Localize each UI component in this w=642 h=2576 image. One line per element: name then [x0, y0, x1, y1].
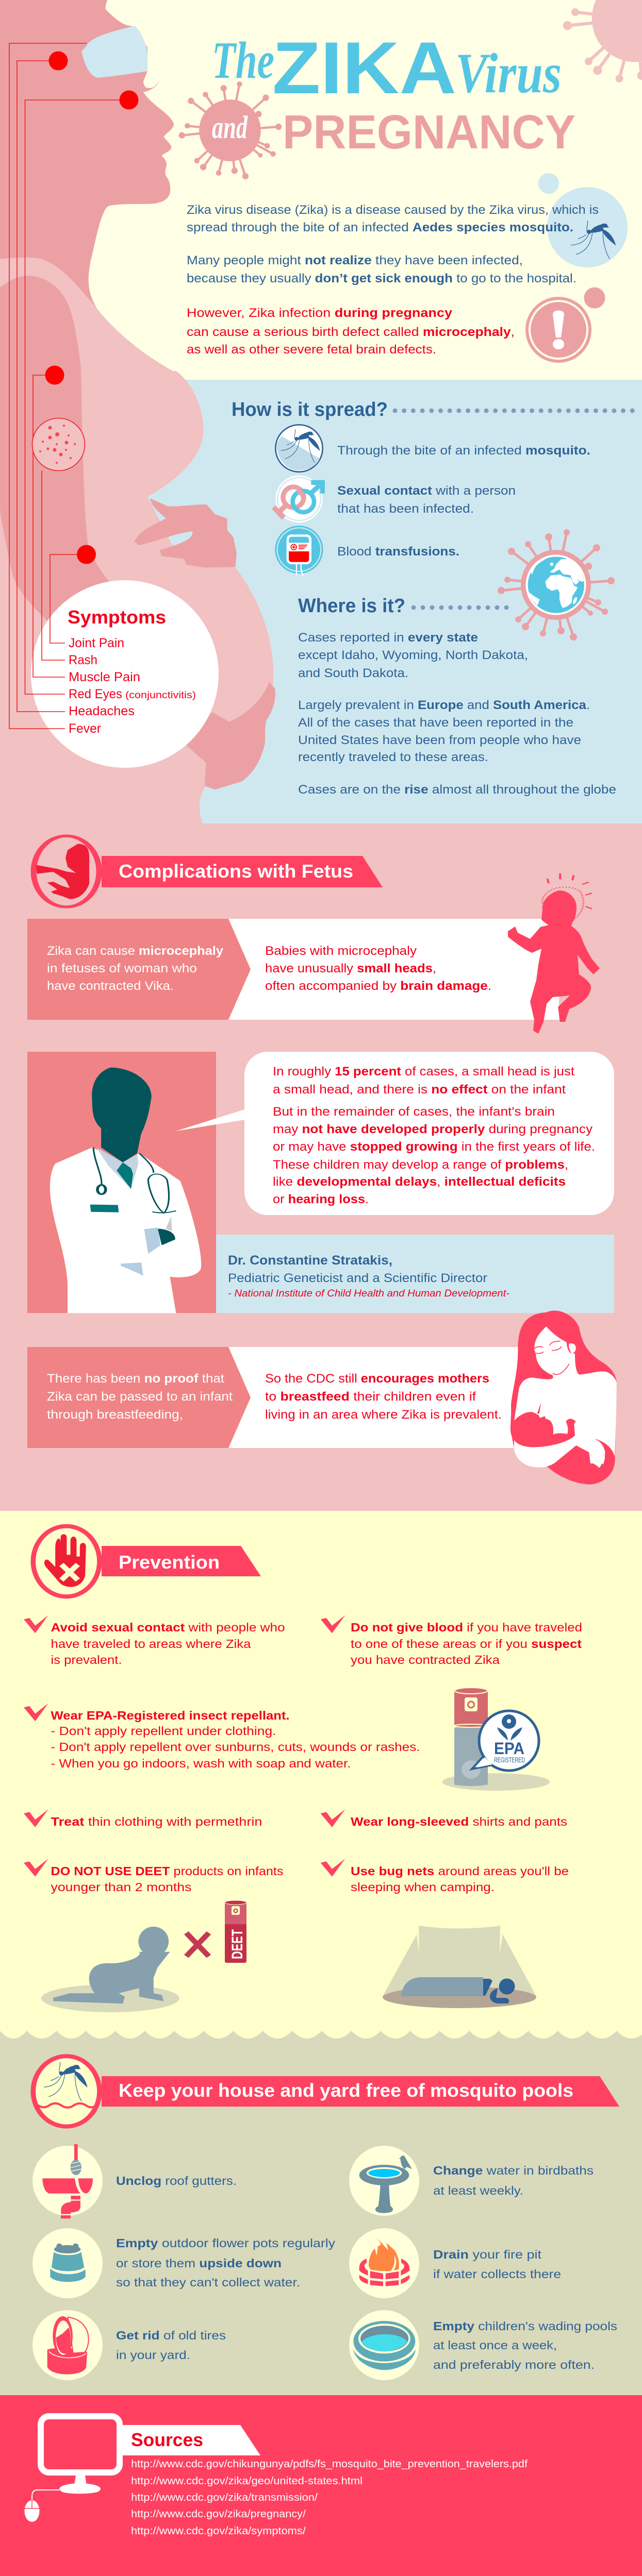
symptoms list: (conjunctivitis) — [125, 690, 196, 701]
prevention tips — [51, 1621, 582, 1894]
heading: where is it: Where is it? — [298, 595, 405, 617]
panel: doctor credit — [216, 1235, 614, 1313]
symptoms list: Headaches — [69, 704, 135, 718]
intro text: Zika virus disease (Zika) is a disease caused by the Zika virus, which is — [187, 203, 599, 217]
mosquito pools tips: in your yard. — [116, 2348, 190, 2362]
icon: wading pool — [353, 2321, 416, 2370]
where is it text: Largely prevalent in Europe and South America . — [298, 698, 590, 712]
icon: mosquito bite — [275, 425, 323, 472]
illustration: crawling baby and DEET: DEET — [229, 1929, 246, 1959]
illustration: pregnant woman silhouette — [0, 0, 275, 824]
symptoms list: Red Eyes — [69, 687, 122, 701]
title: ZIKA — [272, 27, 456, 109]
spread text: Blood transfusions. — [337, 545, 459, 559]
intro text: Many people might not realize they have been infected, — [187, 254, 523, 267]
illustration: bug net tent — [383, 1926, 536, 2008]
background: intro section — [0, 0, 642, 380]
source links: http://www.cdc.gov/zika/geo/united-states.html — [131, 2476, 363, 2487]
background: spread section — [0, 380, 642, 823]
prevention tips: Treat thin clothing with permethrin — [51, 1815, 262, 1828]
background: mosquito pools section — [0, 2031, 642, 2395]
panel: doctor quote bubble: These children may develop a range of problems , — [273, 1158, 568, 1172]
icon: flower pot — [50, 2244, 86, 2282]
illustration: eye highlight — [81, 26, 147, 78]
where is it text: and South Dakota. — [298, 666, 408, 680]
banner: complications with fetus — [34, 836, 383, 907]
where is it text: recently traveled to these areas. — [298, 750, 488, 764]
panel: breastfeeding — [27, 1347, 520, 1448]
where is it text: except Idaho, Wyoming, North Dakota, — [298, 648, 528, 662]
panel: doctor credit: Dr. Constantine Stratakis, — [228, 1253, 392, 1268]
prevention tips: - Don't apply repellent under clothing. — [51, 1724, 276, 1738]
illustration: EPA spray can: EPA — [494, 1739, 524, 1758]
source links — [131, 2459, 528, 2537]
illustration: virus top right — [563, 0, 642, 88]
where is it text — [298, 631, 616, 797]
intro text: However, Zika infection during pregnancy — [187, 306, 453, 320]
mosquito pools tips: and preferably more often. — [433, 2358, 595, 2371]
where is it text: Cases are on the rise almost all throughout the globe — [298, 783, 616, 797]
spread text: Through the bite of an infected mosquito. — [337, 444, 590, 458]
banner: sources: Sources — [131, 2429, 203, 2450]
title: The — [212, 31, 274, 90]
background: sources section — [0, 2395, 642, 2576]
source links: http://www.cdc.gov/zika/symptoms/ — [131, 2526, 306, 2537]
title: PREGNANCY — [283, 105, 575, 159]
spread text — [337, 444, 590, 559]
prevention tips: Avoid sexual contact with people who — [51, 1621, 285, 1634]
mosquito pools tips: Drain your fire pit — [433, 2248, 542, 2261]
source links: http://www.cdc.gov/zika/pregnancy/ — [131, 2508, 306, 2520]
icon: bird bath — [359, 2156, 412, 2213]
mosquito pools tips: Empty children's wading pools — [433, 2319, 617, 2333]
intro text: spread through the bite of an infected Aedes species mosquito. — [187, 221, 573, 234]
banner: sources — [123, 2425, 260, 2455]
panel: doctor quote bubble: or hearing loss . — [273, 1192, 369, 1206]
prevention tips: - Don't apply repellent over sunburns, cuts, wounds or rashes. — [51, 1740, 420, 1754]
icon: computer and mouse — [25, 2416, 120, 2522]
mosquito pools tips: Change water in birdbaths — [433, 2164, 594, 2177]
rash skin detail — [32, 418, 85, 471]
illustration: doctor — [50, 1067, 201, 1313]
prevention tips: DO NOT USE DEET products on infants — [51, 1864, 284, 1878]
background: prevention section — [0, 1511, 642, 2042]
banner: prevention: Prevention — [119, 1552, 220, 1573]
panel: breastfeeding: through breastfeeding, — [47, 1408, 183, 1422]
symptoms list: Joint Pain — [69, 636, 124, 650]
prevention tips: Wear EPA-Registered insect repellant. — [51, 1709, 290, 1722]
icon: old tires — [47, 2316, 89, 2375]
panel: microcephaly — [27, 919, 559, 1020]
symptoms list: Muscle Pain — [69, 670, 140, 684]
prevention tips: Wear long-sleeved shirts and pants — [351, 1815, 567, 1828]
prevention tips: is prevalent. — [51, 1653, 122, 1666]
mosquito pools tips: Get rid of old tires — [116, 2329, 226, 2342]
panel: microcephaly: Zika can cause microcephaly — [47, 944, 224, 958]
panel: doctor quote bubble: But in the remainder of cases, the infant's brain — [273, 1105, 555, 1119]
panel: doctor quote bubble: In roughly 15 percent of cases, a small head is just — [273, 1065, 574, 1079]
title: and — [212, 110, 248, 145]
intro text: can cause a serious birth defect called microcephaly , — [187, 325, 515, 339]
where is it text: All of the cases that have been reported in the — [298, 716, 573, 730]
illustration: EPA spray can — [442, 1688, 550, 1791]
panel: microcephaly: in fetuses of woman who — [47, 962, 197, 975]
panel: doctor credit: - National Institute of Child Health and Human Development- — [228, 1288, 509, 1299]
banner: prevention — [33, 1526, 261, 1596]
background: complications section — [0, 823, 642, 1511]
symptoms list: Rash — [69, 653, 97, 667]
panel: doctor background — [27, 1052, 216, 1313]
icon: warning exclamation — [525, 288, 605, 363]
icon: gutter — [42, 2144, 93, 2218]
spread text: Sexual contact with a person — [337, 484, 516, 498]
symptoms list — [68, 607, 196, 736]
mosquito pools tips: Empty outdoor flower pots regularly — [116, 2236, 336, 2250]
illustration: baby with small head — [508, 873, 600, 1034]
mosquito pools tips: at least weekly. — [433, 2184, 523, 2197]
mosquito pools tips: Unclog roof gutters. — [116, 2174, 237, 2187]
prevention tips: Do not give blood if you have traveled — [351, 1621, 582, 1634]
panel: breastfeeding: to breastfeed their children even if — [265, 1390, 476, 1404]
symptom connector lines — [9, 43, 129, 729]
panel: doctor quote bubble: a small head, and there is no effect on the infant — [273, 1083, 566, 1097]
panel: microcephaly: have unusually small heads , — [265, 962, 436, 975]
icon: blood bag — [275, 526, 323, 576]
panel: doctor credit: Pediatric Geneticist and a Scientific Director — [228, 1271, 487, 1285]
panel: doctor quote bubble: or may have stopped growing in the first years of life. — [273, 1140, 595, 1154]
mosquito pools tips: so that they can't collect water. — [116, 2276, 300, 2289]
where is it text: United States have been from people who have — [298, 733, 581, 747]
icon: fire pit — [359, 2237, 409, 2286]
icon: gender symbols — [274, 476, 325, 523]
banner: keep house free of mosquito pools: Keep your house and yard free of mosquito pools — [119, 2080, 573, 2101]
source links: http://www.cdc.gov/chikungunya/pdfs/fs_mosquito_bite_prevention_travelers.pdf — [131, 2459, 528, 2470]
prevention tips: sleeping when camping. — [351, 1880, 495, 1894]
illustration: breastfeeding mother — [511, 1310, 617, 1485]
mosquito pools tips — [116, 2164, 617, 2371]
panel: breastfeeding: So the CDC still encourages mothers — [265, 1372, 489, 1386]
intro text: because they usually don’t get sick enough to go to the hospital. — [187, 272, 577, 285]
prevention tips: - When you go indoors, wash with soap and water. — [51, 1757, 351, 1770]
title — [179, 27, 575, 179]
prevention tips: younger than 2 months — [51, 1880, 192, 1894]
intro text — [187, 203, 599, 357]
illustration: EPA spray can: REGISTERED — [494, 1756, 525, 1764]
title: Virus — [455, 42, 562, 105]
source links: http://www.cdc.gov/zika/transmission/ — [131, 2492, 318, 2503]
panel: microcephaly: Babies with microcephaly — [265, 944, 417, 958]
prevention tips: you have contracted Zika — [351, 1653, 500, 1666]
symptom markers — [45, 52, 138, 564]
illustration: crawling baby and DEET — [41, 1900, 246, 2012]
icon discs — [32, 2146, 419, 2380]
panel: doctor quote bubble: may not have developed properly during pregnancy — [273, 1122, 592, 1136]
prevention check marks — [24, 1615, 345, 1877]
heading: how is it spread: How is it spread? — [232, 399, 388, 420]
spread text: that has been infected. — [337, 502, 474, 516]
icon: mosquito bubble — [538, 173, 628, 267]
mosquito pools tips: if water collects there — [433, 2267, 561, 2281]
banner: keep house free of mosquito pools — [33, 2056, 619, 2127]
banner: complications with fetus: Complications with Fetus — [119, 861, 353, 882]
panel: microcephaly: have contracted Vika. — [47, 979, 174, 993]
mosquito pools tips: or store them upside down — [116, 2257, 282, 2270]
panel: doctor quote bubble: like developmental delays , intellectual deficits — [273, 1175, 566, 1189]
panel: microcephaly: often accompanied by brain damage . — [265, 979, 491, 993]
prevention tips: Use bug nets around areas you'll be — [351, 1864, 569, 1878]
panel: breastfeeding: There has been no proof that — [47, 1372, 224, 1386]
prevention tips: to one of these areas or if you suspect — [351, 1637, 582, 1651]
where is it text: Cases reported in every state — [298, 631, 478, 645]
panel: symptoms circle — [31, 580, 219, 768]
panel: doctor quote bubble — [176, 1052, 614, 1215]
symptoms list: Fever — [69, 721, 101, 736]
panel: breastfeeding: Zika can be passed to an infant — [47, 1390, 233, 1404]
symptoms list: Symptoms — [68, 607, 166, 628]
panel: breastfeeding: living in an area where Zika is prevalent. — [265, 1408, 502, 1422]
illustration: globe virus — [498, 529, 615, 641]
mosquito pools tips: at least once a week, — [433, 2338, 557, 2352]
prevention tips: have traveled to areas where Zika — [51, 1637, 251, 1651]
intro text: as well as other severe fetal brain defects. — [187, 343, 436, 357]
